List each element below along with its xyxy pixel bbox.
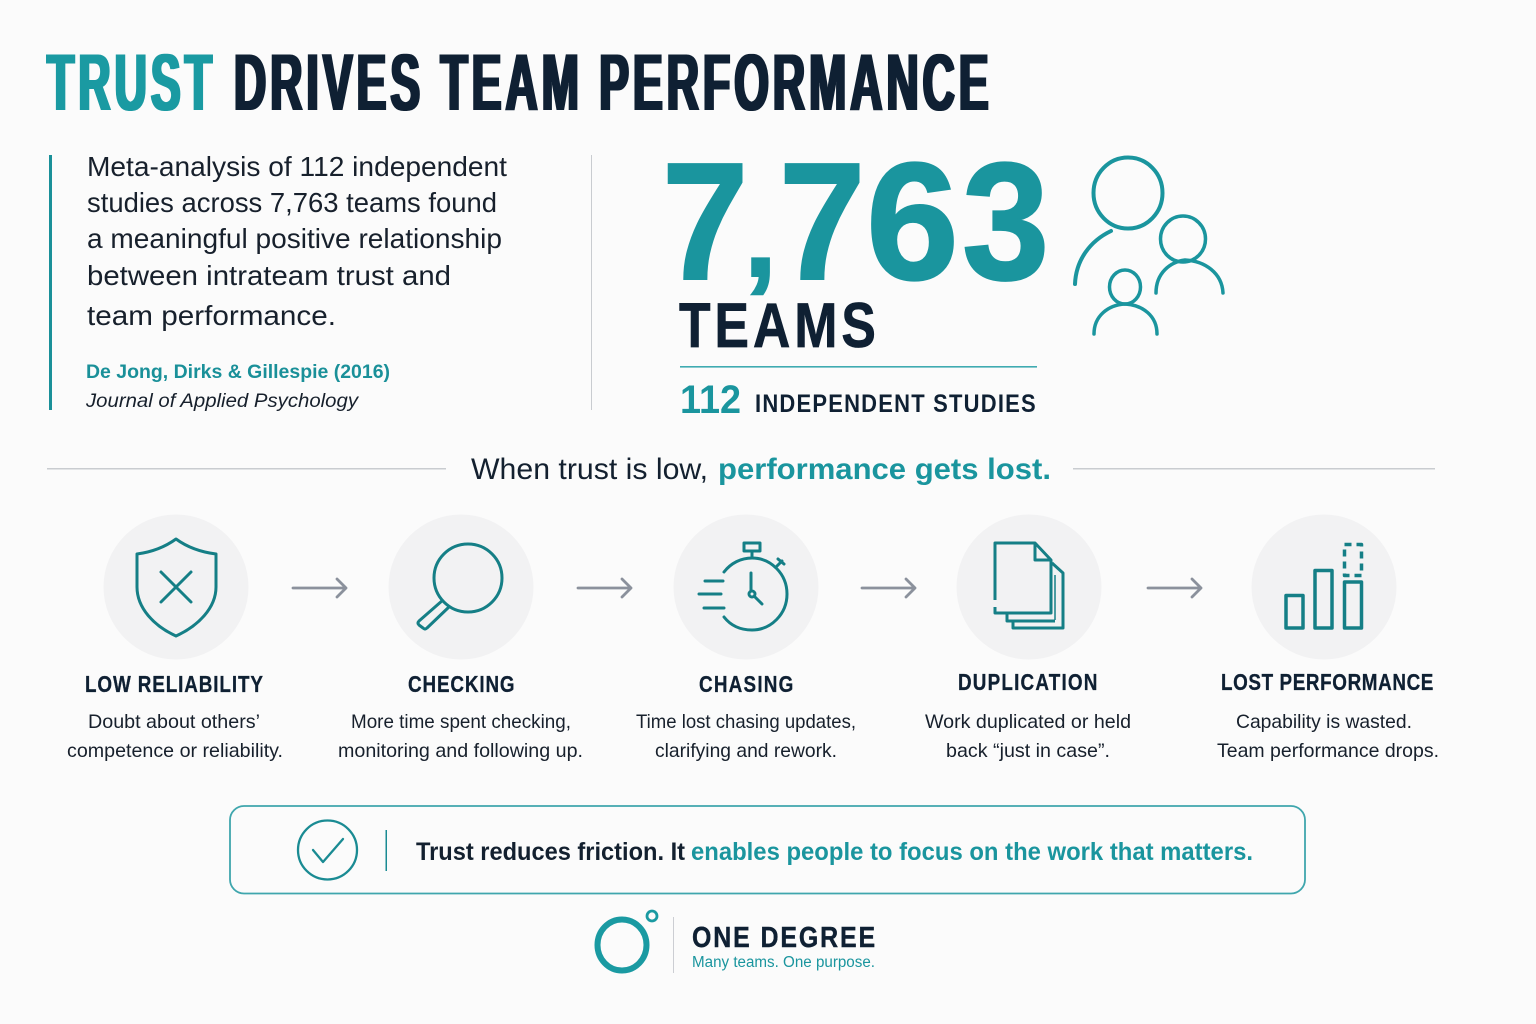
step: low reliability: Doubt about others’ bbox=[88, 711, 260, 733]
text block: summary: team performance. bbox=[87, 300, 336, 331]
big stat: 7,763 teams: 7 bbox=[662, 129, 748, 315]
callout: Trust reduces friction. It bbox=[416, 838, 686, 866]
icon: falling bars bbox=[1286, 544, 1362, 628]
big stat: 7,763 teams: INDEPENDENT STUDIES bbox=[755, 390, 1036, 417]
step: low reliability bbox=[67, 514, 283, 762]
text block: summary bbox=[87, 151, 507, 331]
section heading: When trust is low, bbox=[471, 453, 708, 486]
step: checking: More time spent checking, bbox=[351, 711, 571, 733]
step: duplication: back “just in case”. bbox=[946, 740, 1110, 762]
text block: summary: between intrateam trust and bbox=[87, 260, 451, 291]
step: chasing: clarifying and rework. bbox=[655, 740, 837, 762]
citation: Journal of Applied Psychology bbox=[85, 391, 360, 412]
panel: study summary bbox=[49, 151, 507, 412]
step: duplication: DUPLICATION bbox=[958, 670, 1097, 695]
title: TRUST bbox=[47, 37, 212, 127]
text block: summary: studies across 7,763 teams found bbox=[87, 187, 497, 218]
citation bbox=[85, 362, 390, 412]
step: duplication bbox=[925, 514, 1131, 762]
arrow 1 bbox=[293, 579, 346, 597]
step: checking bbox=[338, 514, 583, 762]
big stat: 7,763 teams: 6 bbox=[866, 129, 959, 315]
big stat: 7,763 teams: 3 bbox=[962, 129, 1049, 315]
step: chasing bbox=[636, 514, 856, 762]
step: chasing: Time lost chasing updates, bbox=[636, 711, 856, 733]
big stat: 7,763 teams: 7 bbox=[779, 129, 865, 315]
big stat: 7,763 teams bbox=[662, 129, 1049, 422]
big stat: 7,763 teams: , bbox=[744, 170, 777, 302]
icon: group of people bbox=[1075, 158, 1223, 334]
step: lost performance: Team performance drops. bbox=[1217, 740, 1439, 762]
arrow 2 bbox=[578, 579, 631, 597]
step: duplication: Work duplicated or held bbox=[925, 711, 1131, 733]
step: lost performance: Capability is wasted. bbox=[1236, 711, 1412, 733]
icon: stacked documents bbox=[995, 543, 1063, 628]
icon: stopwatch bbox=[699, 543, 787, 630]
text block: summary: Meta-analysis of 112 independent bbox=[87, 151, 507, 182]
arrow 4 bbox=[1148, 579, 1201, 597]
big stat: 7,763 teams: 112 bbox=[680, 378, 741, 422]
icon: magnifier bbox=[418, 544, 502, 629]
step: checking: monitoring and following up. bbox=[338, 740, 583, 762]
step: lost performance: LOST PERFORMANCE bbox=[1221, 670, 1433, 695]
logo: One Degree: Many teams. One purpose. bbox=[692, 954, 875, 971]
callout: enables people to focus on the work that matters. bbox=[691, 838, 1253, 866]
icon: degree mark bbox=[598, 911, 657, 970]
section heading: performance gets lost. bbox=[718, 453, 1051, 486]
arrow 3 bbox=[862, 579, 915, 597]
step: lost performance bbox=[1217, 514, 1439, 762]
step: low reliability: LOW RELIABILITY bbox=[85, 672, 263, 697]
step: checking: CHECKING bbox=[408, 672, 515, 697]
callout bbox=[230, 806, 1305, 894]
icon: check circle bbox=[298, 820, 357, 880]
icon: shield with x bbox=[137, 539, 216, 636]
text block: summary: a meaningful positive relationship bbox=[87, 223, 502, 254]
logo: One Degree: ONE DEGREE bbox=[692, 921, 875, 953]
step: chasing: CHASING bbox=[699, 672, 793, 697]
section heading bbox=[47, 453, 1435, 486]
big stat: 7,763 teams: TEAMS bbox=[679, 291, 876, 361]
citation: De Jong, Dirks & Gillespie (2016) bbox=[86, 362, 390, 383]
step: low reliability: competence or reliability. bbox=[67, 740, 283, 762]
logo: One Degree bbox=[598, 911, 875, 973]
title: DRIVES TEAM PERFORMANCE bbox=[234, 37, 989, 127]
